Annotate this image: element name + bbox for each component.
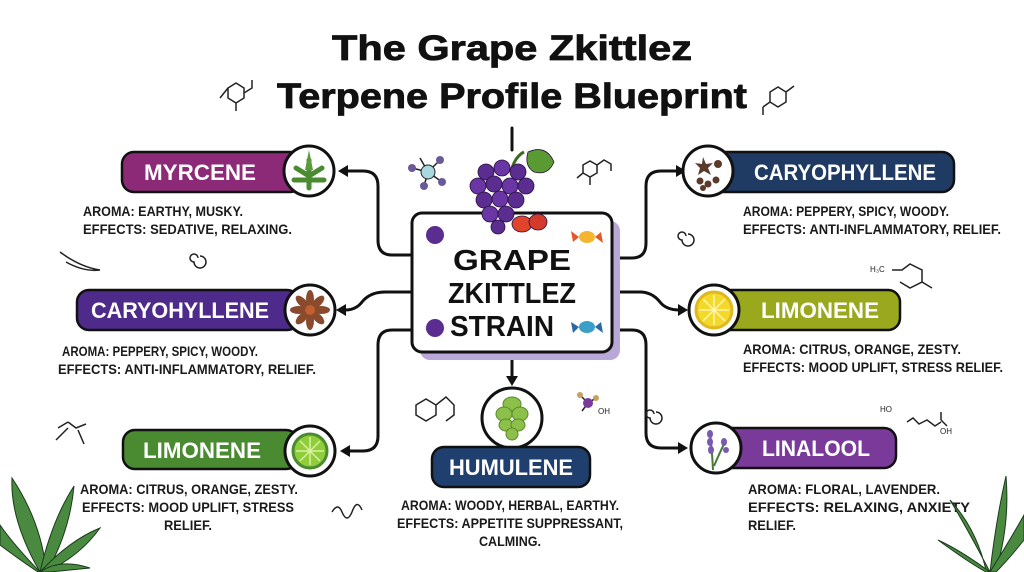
panel: humulene: AROMA: WOODY, HERBAL, EARTHY. (401, 497, 619, 513)
decorative molecules (56, 80, 947, 518)
panel: linalool: LINALOOL (762, 436, 870, 461)
icon: candies (571, 231, 603, 333)
center box: GRAPE (453, 245, 571, 277)
panel: linalool: RELIEF. (748, 517, 796, 533)
panel: myrcene (83, 146, 334, 237)
panel: limonene left: LIMONENE (143, 438, 261, 463)
panel: limonene left: AROMA: CITRUS, ORANGE, ZESTY. (80, 481, 298, 497)
text: OH (598, 407, 610, 416)
panel: caryophyllene right: EFFECTS: ANTI-INFLAMMATORY, RELIEF. (743, 221, 1001, 237)
panel: humulene: EFFECTS: APPETITE SUPPRESSANT, (397, 515, 623, 531)
connectors (345, 128, 680, 451)
panel: myrcene: MYRCENE (144, 160, 256, 185)
panel: caryohyllene: EFFECTS: ANTI-INFLAMMATORY, RELIEF. (58, 361, 316, 377)
panel: limonene right: LIMONENE (761, 298, 879, 323)
panel: myrcene: AROMA: EARTHY, MUSKY. (83, 203, 243, 219)
panel: caryohyllene (58, 285, 335, 377)
panel: caryophyllene right: AROMA: PEPPERY, SPICY, WOODY. (743, 203, 949, 219)
panel: linalool (691, 423, 971, 533)
panel: limonene left: RELIEF. (164, 517, 212, 533)
panel: caryophyllene right (683, 146, 1001, 237)
panel: limonene right: EFFECTS: MOOD UPLIFT, STRESS RELIEF. (743, 359, 1003, 375)
title (277, 29, 747, 116)
panel: linalool: AROMA: FLORAL, LAVENDER. (748, 481, 940, 497)
icon: cannabis leaf right (938, 476, 1024, 572)
panel: humulene: CALMING. (479, 533, 541, 549)
panel: caryohyllene: CARYOHYLLENE (91, 298, 269, 323)
text: OH (940, 427, 952, 436)
center box (412, 150, 620, 360)
panel: caryophyllene right: CARYOPHYLLENE (754, 160, 936, 185)
icon: grapes (470, 150, 554, 234)
panel: limonene right (689, 285, 1003, 375)
panel: myrcene: EFFECTS: SEDATIVE, RELAXING. (83, 221, 292, 237)
title: The Grape Zkittlez (332, 29, 692, 68)
panel: caryohyllene: AROMA: PEPPERY, SPICY, WOODY. (62, 343, 258, 359)
title: Terpene Profile Blueprint (277, 77, 747, 116)
arrowheads (336, 165, 688, 457)
panel: limonene left (80, 426, 335, 533)
center box: ZKITTLEZ (448, 278, 576, 310)
panel: linalool: EFFECTS: RELAXING, ANXIETY (748, 499, 971, 515)
panel: humulene: HUMULENE (449, 455, 573, 480)
center box: STRAIN (450, 311, 554, 343)
text: HO (880, 405, 892, 414)
icon: cannabis leaf left (0, 478, 100, 572)
text: H₃C (870, 265, 885, 274)
panel: limonene right: AROMA: CITRUS, ORANGE, ZESTY. (743, 341, 961, 357)
panel: limonene left: EFFECTS: MOOD UPLIFT, STRESS (82, 499, 294, 515)
panel: humulene (397, 388, 623, 549)
